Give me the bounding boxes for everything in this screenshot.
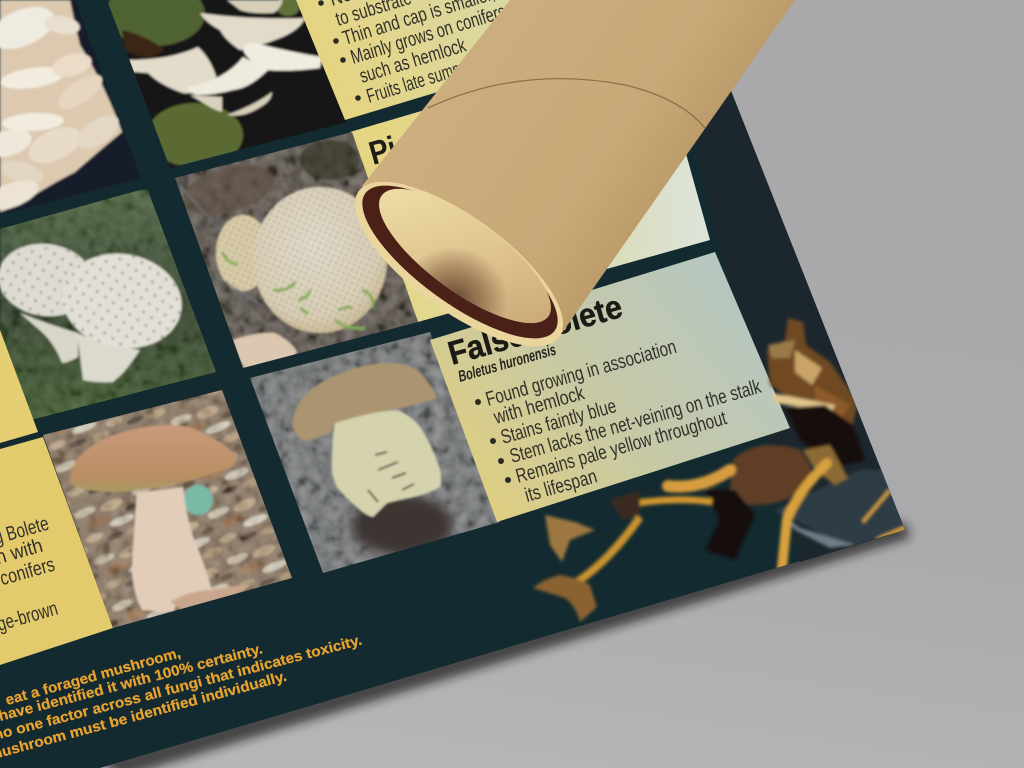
tube dark inner ring: [341, 160, 579, 364]
panel: left yellow fragment: [0, 330, 38, 443]
tube opening rim: [331, 153, 587, 375]
yellow stems: [782, 463, 827, 568]
panel: Bolete description: [0, 437, 113, 665]
warning text: eat a foraged mushroom,: [4, 645, 183, 709]
brown cap cluster: [767, 318, 858, 428]
photo: bolete in leaf litter: [40, 385, 300, 635]
bullet list: Remains pale yellow throughout: [513, 407, 729, 488]
photo: chanterelles on slate: [533, 318, 912, 622]
panel: top species description: [296, 0, 650, 120]
heading: Pi: Pi: [365, 129, 401, 172]
bullet list: its lifespan: [522, 465, 600, 507]
heading: False Bolete: False Bolete: [444, 287, 626, 372]
bullet list: Found growing in association: [483, 336, 679, 411]
panel: Pig species description: [350, 42, 710, 322]
bullet text: such as hemlock: [357, 34, 469, 88]
poster shadow: [100, 522, 910, 768]
bullet list: Stem lacks the net-veining on the stalk: [507, 376, 764, 468]
tube body: [362, 0, 795, 333]
latin name: Boletus huronensis: [456, 342, 558, 386]
bullet list: with hemlock: [491, 382, 588, 429]
bullet list: Stains faintly blue: [498, 395, 619, 449]
warning text: no one factor across all fungi that indicates toxicity.: [0, 633, 364, 744]
icon: kraft cardboard tube: [331, 0, 795, 375]
bullet text: [318, 0, 508, 108]
photo: two puffballs on grass: [0, 190, 220, 430]
central brown cap: [730, 445, 812, 505]
cap on stem: [803, 445, 848, 485]
photo: oyster mushroom cluster: [0, 0, 150, 216]
tube inner shadow: [361, 166, 569, 346]
photo: oyster mushrooms on log: [100, 0, 350, 170]
dark gill mass: [785, 405, 865, 468]
warning text: have identified it with 100% certainty.: [0, 641, 264, 725]
bullet text: Fruits late summer: [364, 54, 479, 108]
small dark underside: [705, 490, 755, 560]
bullet text: [0, 513, 60, 636]
slate rock: [775, 470, 912, 548]
tube seam: [428, 79, 705, 128]
tube inner wall: [361, 166, 569, 346]
bullet list: [475, 336, 764, 507]
photo: bolete on stone: [245, 325, 505, 580]
photo: puffball on forest floor: [170, 130, 430, 370]
panel: False Bolete description: [430, 252, 790, 522]
